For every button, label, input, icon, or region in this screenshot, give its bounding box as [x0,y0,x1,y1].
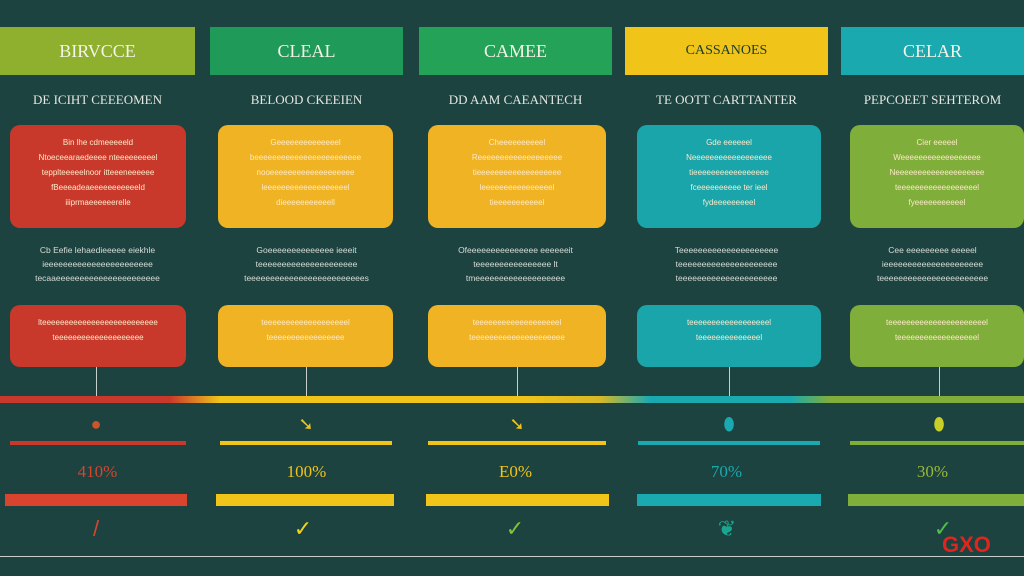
subtitle: col1: DE ICIHT CEEEOMEN [33,92,162,107]
icon: col5 check: ✓ [934,516,952,541]
box: col1 top [10,125,186,228]
box: col2 top: dieeeeeeeeeeell [276,198,335,207]
percent: col1: 410% [78,462,117,481]
icon: col4: ⬮ [723,414,735,434]
text: col2 mid: Goeeeeeeeeeeeeee ieeeit [256,245,357,255]
header: col3 [419,27,612,75]
box: col3 bottom: teeeeeeeeeeeeeeeeeeeee [469,333,565,342]
box: col5 top: fyeeeeeeeeeeel [909,198,965,207]
header: col1 [0,27,195,75]
icon: col1 mark: / [93,516,99,541]
percent: col4: 70% [711,462,742,481]
text: col5 mid [877,245,988,283]
box: col1 top: iiiprmaeeeeeerelle [65,198,131,207]
icon: col4 leaf: ❦ [718,516,736,541]
subtitle: col2: BELOOD CKEEIEN [251,92,362,107]
icon: col3 check: ✓ [506,516,524,541]
box: col3 top: tieeeeeeeeeeel [490,198,544,207]
text: col1 mid [35,245,160,283]
box: col1 bottom [10,305,186,367]
text: col2 mid [244,245,369,283]
box: col5 top: Weeeeeeeeeeeeeeeeee [893,153,981,162]
timeline bar [0,396,1024,403]
box: col4 top: Neeeeeeeeeeeeeeeeee [686,153,772,162]
subtitle: col4: TE OOTT CARTTANTER [656,92,797,107]
box: col3 top: tieeeeeeeeeeeeeeeeeee [473,168,561,177]
text: col4 mid: Teeeeeeeeeeeeeeeeeeeee [675,245,778,255]
header: col4 [625,27,828,75]
text: col1 mid: ieeeeeeeeeeeeeeeeeeeeeee [42,259,153,269]
text: col3 mid: tmeeeeeeeeeeeeeeeeeee [466,273,565,283]
icon: col5: ⬮ [933,414,945,434]
box: col5 bottom: teeeeeeeeeeeeeeeeeeeeeel [886,318,988,327]
box: col3 top [428,125,606,228]
box: col1 top: Bin lhe cdmeeeeeld [63,138,133,147]
box: col4 top: fceeeeeeeeee ter ieel [691,183,767,192]
box: col5 top: Neeeeeeeeeeeeeeeeeeee [890,168,984,177]
box: col2 top: Geeeeeeeeeeeeeel [270,138,341,147]
box: col1 bottom: teeeeeeeeeeeeeeeeeeee [52,333,144,342]
box: col1 top: Ntoeceearaedeeee nteeeeeeeeel [39,153,157,162]
text: col1 mid: tecaaeeeeeeeeeeeeeeeeeeeeee [35,273,160,283]
box: col4 top: Gde eeeeeel [706,138,752,147]
header: col2: CLEAL [278,40,336,60]
icon: col2 check: ✓ [294,516,312,541]
text: col3 mid [458,245,573,283]
percent: col5: 30% [917,462,948,481]
text: col1 mid: Cb Eefie lehaedieeeee eiekhle [40,245,155,255]
text: col4 mid [674,245,778,283]
box: col2 bottom [218,305,393,367]
box: col5 top [850,125,1024,228]
watermark: GXO: GXO [942,532,991,557]
box: col3 top: Reeeeeeeeeeeeeeeeeee [472,153,562,162]
header: col1: BIRVCCE [59,40,136,60]
text: col4 mid: teeeeeeeeeeeeeeeeeeeee [676,273,777,283]
box: col4 bottom [637,305,821,367]
icon: col1 dot: ● [91,414,101,434]
percent: col2: 100% [287,462,326,481]
box: col4 bottom: teeeeeeeeeeeeeeeeeel [687,318,771,327]
text: col4 mid: teeeeeeeeeeeeeeeeeeeee [676,259,777,269]
header: col5 [841,27,1024,75]
header: col3: CAMEE [484,40,547,60]
box: col5 bottom [850,305,1024,367]
box: col2 top: beeeeeeeeeeeeeeeeeeeeeeee [250,153,361,162]
box: col5 top: Cier eeeeel [917,138,957,147]
box: col5 top: teeeeeeeeeeeeeeeeeel [895,183,979,192]
box: col4 bottom: teeeeeeeeeeeeeel [696,333,762,342]
text: col5 mid: Cee eeeeeeeee eeeeel [888,245,977,255]
box: col2 bottom: teeeeeeeeeeeeeeeee [267,333,344,342]
box: col2 top [218,125,393,228]
text: col3 mid: teeeeeeeeeeeeeeee lt [473,259,558,269]
box: col2 top: nooeeeeeeeeeeeeeeeeeee [257,168,354,177]
box: col4 top [637,125,821,228]
icon: col3: ➘ [509,414,525,434]
subtitle: col5: PEPCOEET SEHTEROM [864,92,1001,107]
text: col5 mid: ieeeeeeeeeeeeeeeeeeeee [882,259,983,269]
header: col5: CELAR [903,40,962,60]
box: col1 top: fBeeeadeaeeeeeeeeeeeld [51,183,145,192]
text: col3 mid: Ofeeeeeeeeeeeeeee eeeeeeit [458,245,573,255]
text: col2 mid: teeeeeeeeeeeeeeeeeeeeeeeees [244,273,369,283]
box: col1 top: tepplteeeeelnoor itteeeneeeeee [42,168,154,177]
text: col5 mid: teeeeeeeeeeeeeeeeeeeeeee [877,273,988,283]
box: col4 top: fydeeeeeeeeel [703,198,755,207]
box: col4 top: tieeeeeeeeeeeeeeeee [689,168,769,177]
box: col3 bottom: teeeeeeeeeeeeeeeeeeel [473,318,561,327]
box: col3 top: leeeeeeeeeeeeeeeel [480,183,554,192]
text: col2 mid: teeeeeeeeeeeeeeeeeeeee [256,259,357,269]
box: col3 bottom [428,305,606,367]
box: col2 top: leeeeeeeeeeeeeeeeeeel [261,183,350,192]
header: col4: CASSANOES [686,43,767,58]
box: col5 bottom: teeeeeeeeeeeeeeeeeel [895,333,979,342]
box: col1 bottom: lteeeeeeeeeeeeeeeeeeeeeeeeee [38,318,158,327]
header: col2 [210,27,403,75]
subtitle: col3: DD AAM CAEANTECH [449,92,582,107]
percent: col3: E0% [499,462,532,481]
box: col3 top: Cheeeeeeeeeel [489,138,545,147]
icon: col2: ➘ [298,414,314,434]
box: col2 bottom: teeeeeeeeeeeeeeeeeeel [261,318,350,327]
